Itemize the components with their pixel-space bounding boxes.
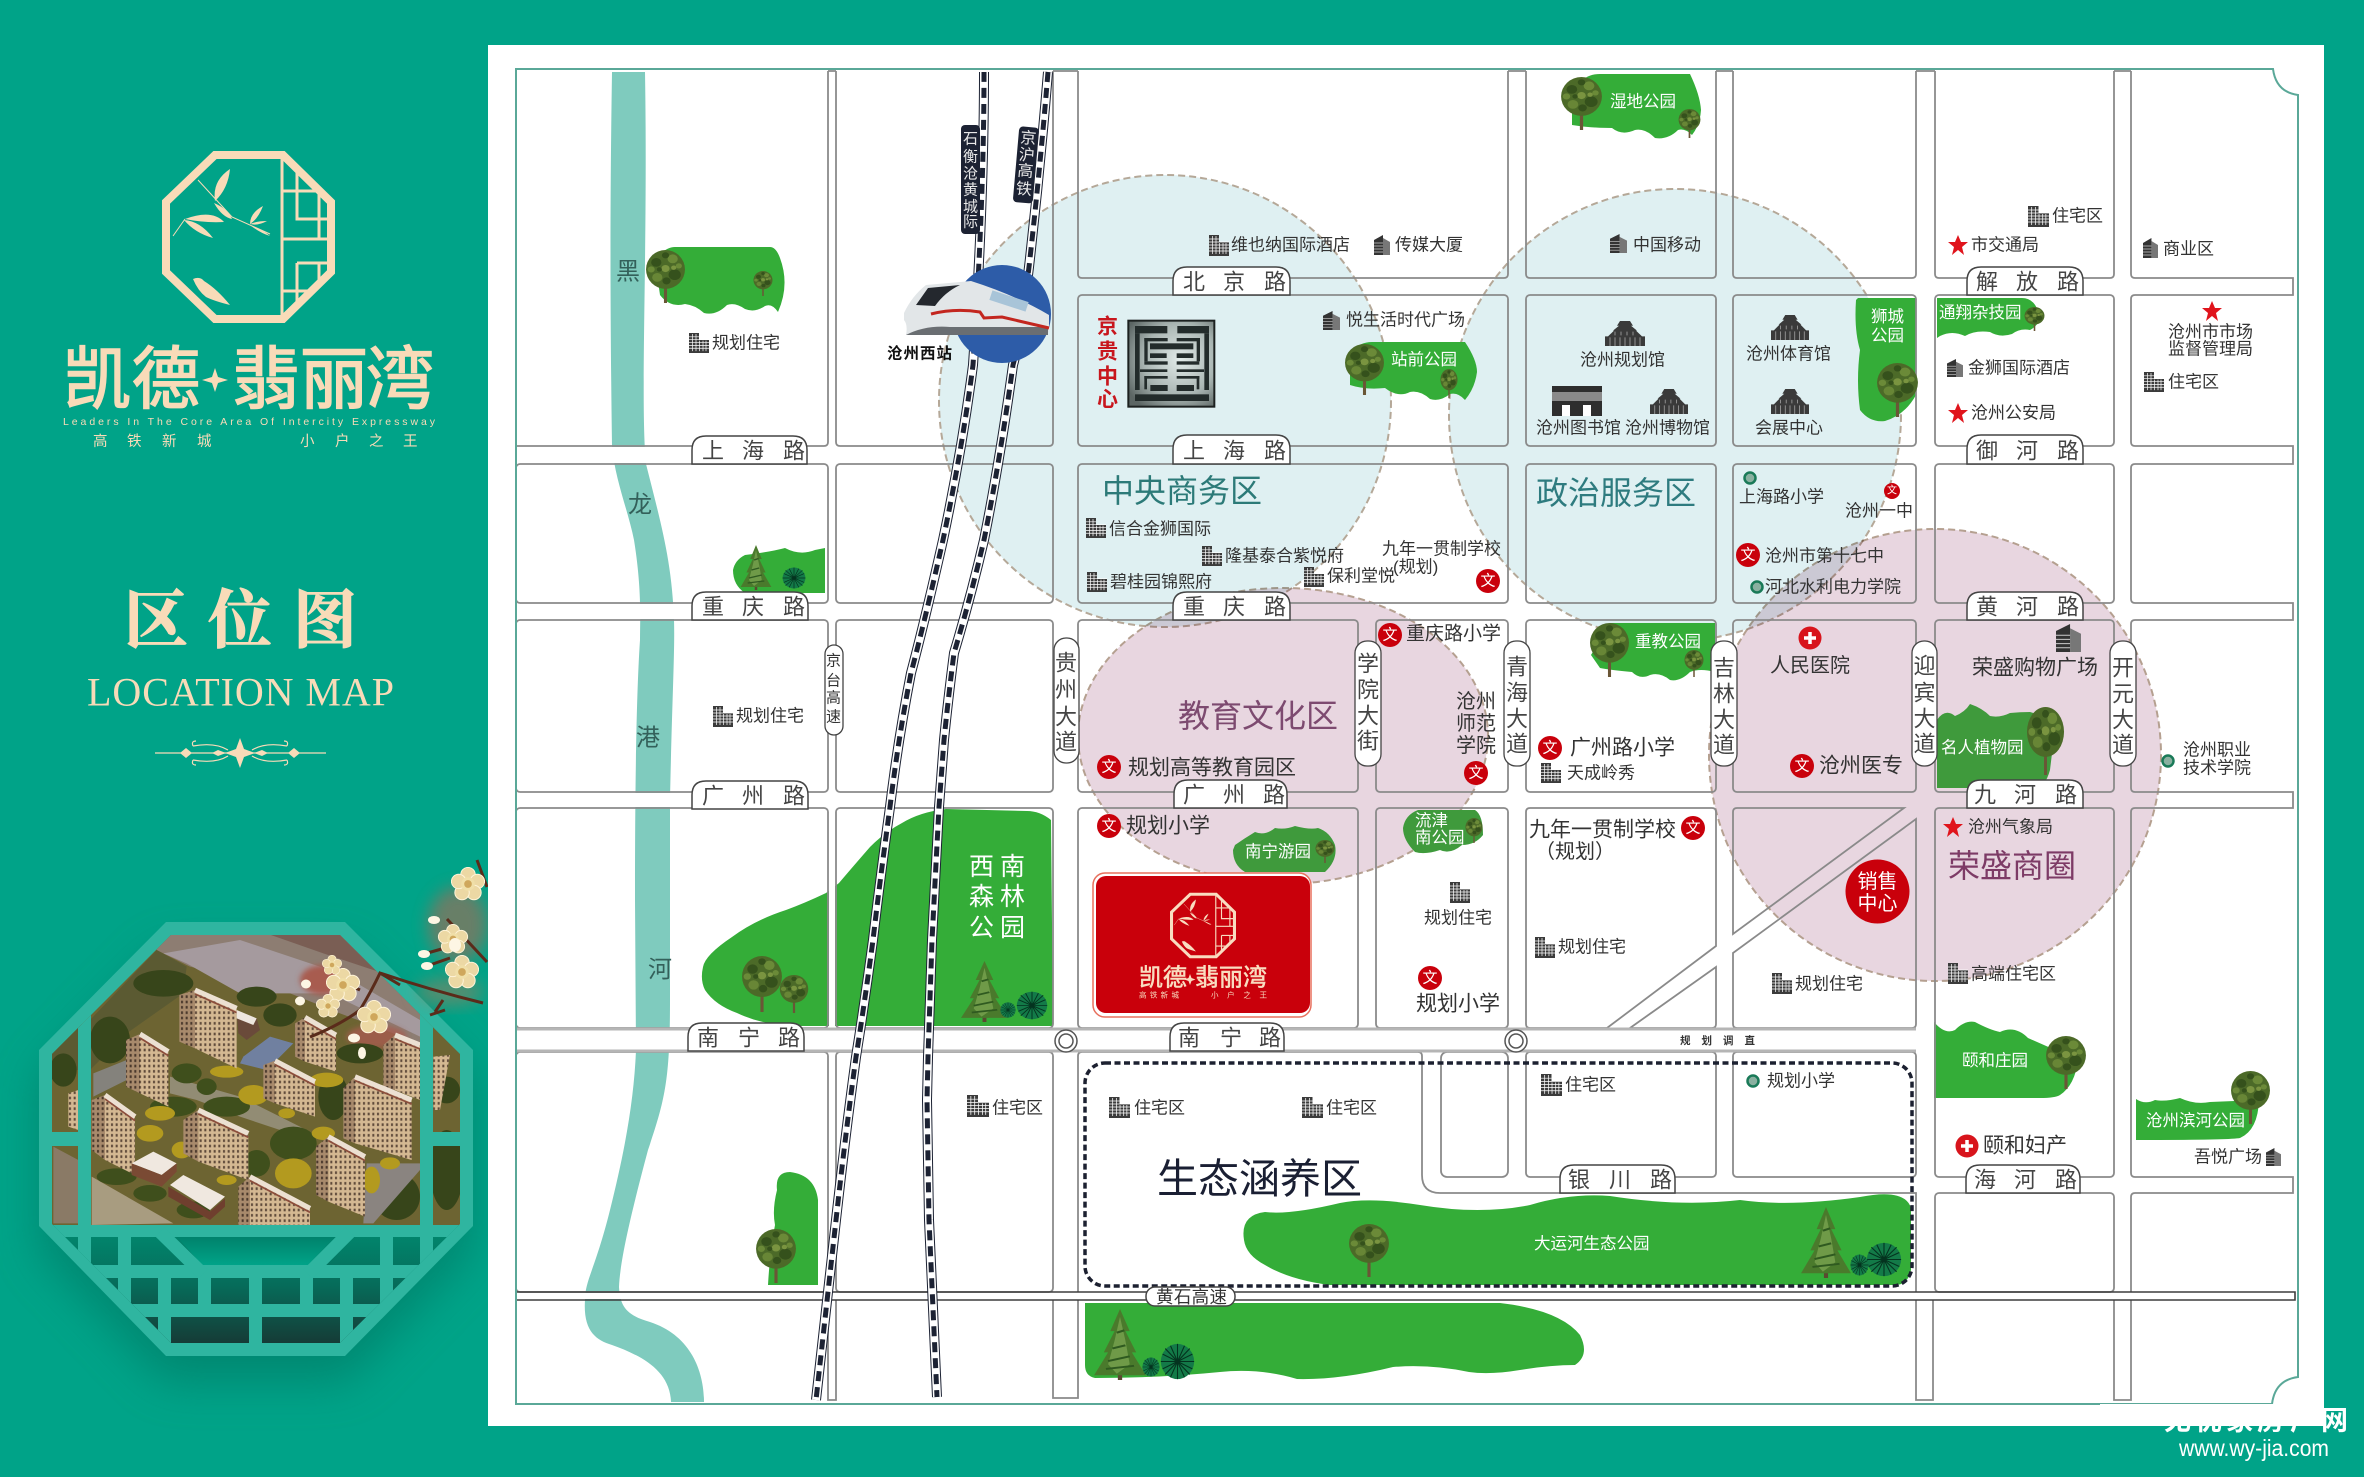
poi: premium housing: 高端住宅区 [1971,964,2056,984]
river name labels: 河 [648,956,672,984]
road label: haihe: 海河路 [1974,1168,2077,1192]
poi: convention center: 会展中心 [1755,418,1823,438]
poi: rongsheng mall [1972,624,2098,680]
station: cangzhou west [887,265,1051,363]
poi: market supervision bureau: 监督管理局 [2168,340,2253,358]
road label: jingtai expressway [825,645,843,735]
poi: vocational college: 技术学院 [2183,758,2251,778]
poi: guangzhou road primary school: 广州路小学 [1570,736,1675,760]
zone: rongsheng commerce [1709,529,2161,981]
poi: residential and commercial [689,206,2281,1166]
brand title [63,342,434,418]
poi: tiancheng lingxiu [1541,763,1635,783]
project marker: kaide feili bay [1093,873,1311,1017]
poi: no17 middle school: 文 [1740,546,1756,564]
sales center marker [1846,860,1910,924]
plum blossom branch [295,860,488,1059]
brand title: 翡丽湾 [232,342,434,418]
poi: planned housing west: 规划住宅 [736,706,804,726]
poi: residential south 4: 住宅区 [1565,1076,1616,1094]
poi: shanghai road primary school [1739,472,1824,506]
project marker: kaide feili bay: 高铁新城 [1139,990,1180,1000]
road label: beijing: 北京路 [1183,270,1286,294]
panel: white map sheet [488,45,2324,1426]
road labels vertical [825,638,2136,766]
river name labels: 港 [636,724,660,752]
landmark: jinggui center [1097,314,1214,412]
park name labels: 南公园 [1415,828,1464,847]
poi: cangzhou normal college: 学院 [1456,734,1496,757]
station: cangzhou west: 沧州西站 [887,344,952,362]
poi: vienna hotel: 维也纳国际酒店 [1231,236,1350,254]
railway: beijing shanghai high speed [927,72,1048,1397]
road label: qinghai avenue: 青海大道 [1506,654,1528,756]
road label: chongqing east: 重庆路 [1183,594,1286,620]
park name labels: 重教公园 [1635,632,1701,651]
poi: planned housing northwest: 规划住宅 [712,334,780,352]
road note: planned straightening: 规划调直 [1680,1034,1756,1047]
poi: vocational college: 沧州职业 [2183,740,2251,760]
poi: no17 middle school: 沧州市第十七中 [1765,546,1884,566]
poi: planned housing central [1424,882,1492,928]
poi: cangzhou medical college: 文 [1794,758,1810,774]
park name labels: 西南 [969,853,1025,881]
sales center marker: 销售 [1858,870,1898,893]
poi: planned higher education park: 文 [1101,758,1117,776]
parks [655,74,2259,1379]
park: grand canal [1243,1194,1911,1285]
rendered towers [68,990,450,1225]
poi: museum: 沧州博物馆 [1625,418,1710,438]
park name labels: 公园 [1871,327,1904,345]
road label: jilin avenue [1711,641,1737,766]
poi: residential south 2 [1109,1097,1185,1118]
poi: stadium [1746,315,1831,364]
railway: shiheng canghuang intercity [816,72,984,1400]
road label: xueyuan street [1355,641,1381,766]
poi: nine year school north: (规划) [1393,558,1438,576]
road label: yinchuan: 银川路 [1568,1168,1672,1192]
logo: octagon window emblem [166,155,331,319]
poi: residential south 3: 住宅区 [1326,1098,1377,1118]
poi: planned housing 2: 规划住宅 [1558,938,1626,956]
poi: planned housing central: 规划住宅 [1424,908,1492,928]
park: tongxiang acrobatics [1937,298,2040,338]
poi: planned housing 3: 规划住宅 [1795,974,1863,994]
poi: convention center [1755,389,1823,438]
poi: traffic bureau: 市交通局 [1971,236,2039,254]
watermark: 无忧家房产网 [2164,1406,2348,1436]
ornament [155,738,326,768]
poi: planned primary school central: 规划小学 [1416,992,1500,1016]
park name labels: 公园 [969,914,1025,942]
park: northwest green [655,247,785,314]
road label: xueyuan street: 学院大街 [1357,652,1379,754]
road label: kaiyuan avenue: 开元大道 [2112,656,2134,758]
park: binhe [2136,1098,2259,1140]
brand title: 凯德 [63,342,200,418]
zone title: ecological conservation: 生态涵养区 [1157,1156,1362,1202]
poi: residential south 4 [1541,1074,1616,1096]
poi: cangzhou no1 middle school: 沧州一中 [1845,502,1913,520]
poi: planned higher education park: 规划高等教育园区 [1128,756,1296,780]
zone title: rongsheng commerce: 荣盛商圈 [1948,848,2076,884]
poi: cangzhou no1 middle school [1845,483,1913,520]
poi: residential south 1: 住宅区 [992,1098,1043,1118]
park: southwest forest [702,809,1053,1026]
poi: planning museum: 沧州规划馆 [1580,350,1665,370]
brand slogan English: Leaders In The Core Area Of Intercity Expressway [63,416,436,428]
poi: planned primary school west: 规划小学 [1126,814,1210,838]
zone title: government services: 政治服务区 [1536,475,1696,511]
project marker: kaide feili bay: 凯德翡丽湾 [1139,964,1267,992]
road label: guangzhou east: 广州路 [1183,782,1285,808]
park name labels: 通翔杂技园 [1939,303,2022,322]
road label: guangzhou west: 广州路 [702,784,805,808]
road label: shanghai west: 上海路 [702,438,805,464]
park: celebrities botanical [1937,704,2056,788]
white road strips crossing river and park [520,447,2290,1299]
zone: education culture [1078,588,1488,884]
poi: library: 沧州图书馆 [1536,418,1621,438]
road label: chongqing west: 重庆路 [702,594,805,620]
road label: jiefang: 解放路 [1976,270,2079,294]
river [585,72,704,1402]
poi: biguiyuan jinxi: 碧桂园锦熙府 [1110,572,1212,592]
road label: shanghai east: 上海路 [1183,438,1286,464]
poi: yihe maternity hospital: 颐和妇产 [1983,1134,2067,1158]
ecological zone dashed outline [1085,1063,1912,1286]
poi: cangzhou normal college: 师范 [1456,712,1496,735]
poi: people's hospital [1770,626,1850,677]
park name labels: 流津 [1415,811,1448,830]
poi: nine year school east: 文 [1685,820,1701,836]
zone: central business [939,175,1391,627]
park: station front [1350,342,1477,400]
park: south small [768,1172,818,1285]
poi: poly tangyue [1304,566,1395,587]
brand slogan Chinese: 高铁新城 [93,433,212,450]
photo window shadow [39,950,473,1382]
brand slogan Chinese [93,433,418,450]
poi: nine year school north: 九年一贯制学校 [1382,540,1501,558]
park: chongjiao [1591,623,1715,680]
road label: jilin avenue: 吉林大道 [1713,656,1735,758]
poi: planned primary school west: 文 [1101,818,1117,834]
poi: cangzhou normal college: 沧州 [1456,690,1496,713]
zone title: central business: 中央商务区 [1102,473,1262,509]
poi: nine year school north: 文 [1480,572,1496,590]
road label: jiuhe: 九河路 [1974,782,2077,808]
poi: longjitai ziyue: 隆基泰合紫悦府 [1225,546,1344,566]
park name labels: 颐和庄园 [1962,1051,2028,1070]
road network [516,71,2293,1400]
heading: location map Chinese: 区位图 [124,586,357,656]
poi: chongqing road primary school: 重庆路小学 [1406,622,1501,644]
river name labels: 龙 [628,492,652,518]
heading: location map English: LOCATION MAP [87,670,394,714]
poi: planned primary school south: 规划小学 [1767,1072,1835,1090]
poi: vocational college [2162,740,2251,778]
zone: government services [1449,189,1901,641]
poi: nine year school east: 九年一贯制学校 [1529,818,1676,842]
poi: cangzhou medical college: 沧州医专 [1819,754,1903,778]
park name labels: 森林 [969,883,1025,911]
road label: jingtai expressway: 京台高速 [826,652,841,726]
park name labels [969,92,2245,1253]
poi: market supervision bureau [2168,301,2253,358]
road label: yuhe: 御河路 [1976,438,2079,464]
poi: planned housing 3 [1772,973,1863,994]
poi: media building: 传媒大厦 [1395,236,1463,254]
road: huangshi expressway lines [516,1292,2295,1300]
poi: yueshenghuo plaza: 悦生活时代广场 [1346,310,1465,330]
river name labels: 黑 [616,258,640,286]
poi: poly tangyue: 保利堂悦 [1327,566,1395,586]
railway label: high speed: 京沪高铁 [1015,129,1037,199]
road label: nanning east: 南宁路 [1178,1026,1281,1050]
poi: stadium: 沧州体育馆 [1746,344,1831,364]
poi: people's hospital: 人民医院 [1770,654,1850,677]
poi: shanghai road primary school: 上海路小学 [1739,488,1824,506]
brand slogan Chinese: 小户之王 [300,433,418,450]
poi: no17 middle school [1736,543,1884,567]
poi: government and civic halls [1536,235,2253,837]
park name labels: 湿地公园 [1610,92,1676,111]
poi: commercial area: 商业区 [2163,240,2214,258]
poi: meteorological bureau: 沧州气象局 [1968,818,2053,836]
poi: planned primary school central [1416,966,1500,1016]
park name labels: 南宁游园 [1245,842,1311,861]
poi: residential east: 住宅区 [2168,372,2219,392]
poi: planned primary school central: 文 [1422,970,1438,986]
poi: residential south 3 [1302,1097,1377,1118]
poi: water conservancy college: 河北水利电力学院 [1765,578,1901,596]
watermark: www.wy-jia.com [2178,1435,2329,1461]
road label: nanning west: 南宁路 [697,1026,800,1050]
project marker: kaide feili bay: 小户之王 [1211,990,1268,1000]
road label: guizhou avenue: 贵州大道 [1055,650,1077,754]
poi: commercial area [2143,238,2214,258]
road label: qinghai avenue [1504,641,1530,766]
poi: chongqing road primary school [1378,622,1501,647]
poi: china mobile: 中国移动 [1633,236,1701,254]
poi: market supervision bureau: 沧州市市场 [2168,322,2253,342]
poi: cangzhou normal college [1456,690,1496,785]
poi: schools and hospitals [1097,472,2251,1158]
railway label: intercity: 石衡沧黄城际 [963,130,978,230]
landmark: jinggui center: 京贵中心 [1097,314,1118,412]
road label: yingbin avenue: 迎宾大道 [1913,654,1936,756]
road label: huangshi expressway: 黄石高速 [1156,1287,1227,1307]
poi: cangzhou no1 middle school: 文 [1887,484,1897,496]
poi: residential south 2: 住宅区 [1134,1098,1185,1118]
poi: nine year school east [1529,816,1705,863]
poi: museum [1625,389,1710,438]
map frame with notched corners [516,69,2298,1404]
poi: planned housing 2 [1535,937,1626,958]
poi: jinshi hotel: 金狮国际酒店 [1968,358,2070,378]
road label: huanghe: 黄河路 [1976,594,2079,620]
poi: chongqing road primary school: 文 [1382,626,1398,644]
poi: public security bureau: 沧州公安局 [1971,404,2056,422]
poi: residential northeast [2028,206,2103,227]
park: shicheng [1856,298,1916,421]
poi: planned housing west [713,706,804,727]
road label: kaiyuan avenue [2110,641,2136,766]
park: wetland [1572,74,1701,138]
zone title: education culture: 教育文化区 [1178,698,1338,734]
road labels horizontal [688,267,2083,1307]
photo window: octagon frame with rendering [39,922,473,1356]
river name labels [616,258,672,984]
poi: wuyue plaza: 吾悦广场 [2194,1148,2262,1166]
roundabouts [1055,1030,1527,1052]
park: chongqing road green [733,548,825,593]
poi: china mobile [1610,234,1701,254]
park name labels: 沧州滨河公园 [2146,1111,2245,1130]
zone circles [939,175,2161,981]
poi: residential east [2144,372,2219,392]
poi: cangzhou normal college: 文 [1468,764,1484,782]
park: liujin south [1403,810,1483,853]
poi: planning museum [1580,321,1665,370]
park name labels: 狮城 [1871,307,1904,326]
park: yihe manor [1934,1022,2078,1098]
park: nanning garden [1233,826,1336,872]
poi: nine year school north [1382,540,1501,593]
sales center marker: 中心 [1858,892,1898,915]
poi: library [1536,386,1621,438]
trees [646,77,2270,1380]
white sheet margin over watermark [2100,1404,2324,1426]
poi: residential northeast: 住宅区 [2052,206,2103,226]
watermark [2164,1406,2348,1461]
park: south of huangshi [1085,1303,1584,1379]
poi: residential south 1 [967,1095,1043,1118]
park name labels: 站前公园 [1391,350,1457,369]
park name labels: 名人植物园 [1941,738,2024,757]
poi: rongsheng mall: 荣盛购物广场 [1972,656,2098,680]
poi: xinhe jinshi: 信合金狮国际 [1109,520,1211,538]
poi: nine year school east: （规划） [1535,840,1615,863]
low clubhouse buildings [132,1152,177,1175]
poi: tiancheng lingxiu: 天成岭秀 [1567,764,1635,782]
poi: guangzhou road primary school: 文 [1542,740,1558,756]
park name labels: 大运河生态公园 [1534,1234,1650,1253]
